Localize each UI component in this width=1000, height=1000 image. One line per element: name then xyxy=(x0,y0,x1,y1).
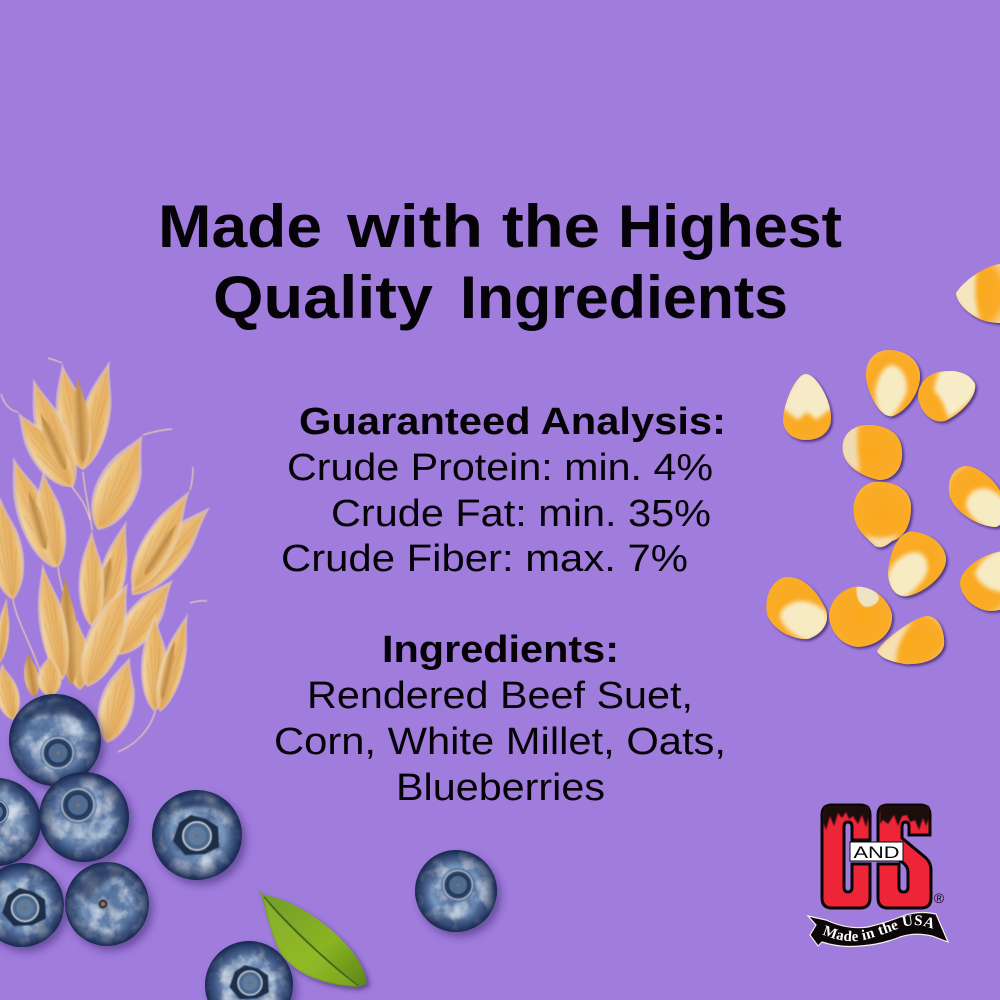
title: Ingredients xyxy=(460,264,788,331)
oat plant xyxy=(0,357,223,752)
logo ribbon banner: Made in the USA xyxy=(822,915,933,942)
corn kernel xyxy=(877,616,948,668)
blueberry 5 xyxy=(0,863,64,947)
corn kernel xyxy=(866,350,924,420)
corn kernel xyxy=(918,371,979,425)
blueberry 2 xyxy=(39,772,129,862)
corn kernel xyxy=(888,532,950,600)
corn kernel xyxy=(960,552,1000,614)
blueberry cluster and leaf xyxy=(0,694,497,1000)
blueberry 3 xyxy=(0,778,41,866)
corn kernel xyxy=(783,374,834,444)
logo letter C xyxy=(822,805,870,908)
logo AND box: AND xyxy=(854,843,900,862)
guaranteed analysis text block: Crude Protein: min. 4% xyxy=(287,447,713,489)
icon: green leaf xyxy=(258,889,366,987)
blueberry 7 xyxy=(415,850,497,932)
ingredients text block: Ingredients: xyxy=(382,629,619,671)
guaranteed analysis text block xyxy=(281,401,726,580)
ingredients text block: Corn, White Millet, Oats, xyxy=(274,721,726,763)
corn kernel xyxy=(829,586,896,650)
title: the xyxy=(502,193,600,260)
logo: C and S, Made in the USA xyxy=(806,804,949,948)
corn kernel xyxy=(842,425,906,482)
registered mark: ® xyxy=(934,890,945,906)
logo AND box xyxy=(850,842,903,862)
title xyxy=(158,193,842,331)
blueberry 4 xyxy=(152,790,242,880)
ingredients text block xyxy=(274,629,726,809)
title: Quality xyxy=(213,264,434,331)
corn kernel xyxy=(956,264,1000,326)
blueberry 1 xyxy=(9,694,101,786)
corn kernels xyxy=(760,258,1000,668)
title: Made xyxy=(158,193,322,260)
blueberry 6 xyxy=(65,862,149,946)
corn kernel xyxy=(854,482,914,551)
guaranteed analysis text block: Crude Fat: min. 35% xyxy=(331,493,711,535)
corn kernel xyxy=(766,577,830,643)
logo flames xyxy=(823,806,929,830)
blueberry 8 xyxy=(205,941,293,1000)
ingredients text block: Rendered Beef Suet, xyxy=(307,675,693,717)
title: Highest xyxy=(618,193,842,260)
guaranteed analysis text block: Guaranteed Analysis: xyxy=(299,401,726,443)
corn kernel xyxy=(948,466,1000,530)
guaranteed analysis text block: Crude Fiber: max. 7% xyxy=(281,538,688,580)
ingredients text block: Blueberries xyxy=(396,767,605,809)
logo letter S xyxy=(878,805,931,908)
title: with xyxy=(346,193,483,260)
